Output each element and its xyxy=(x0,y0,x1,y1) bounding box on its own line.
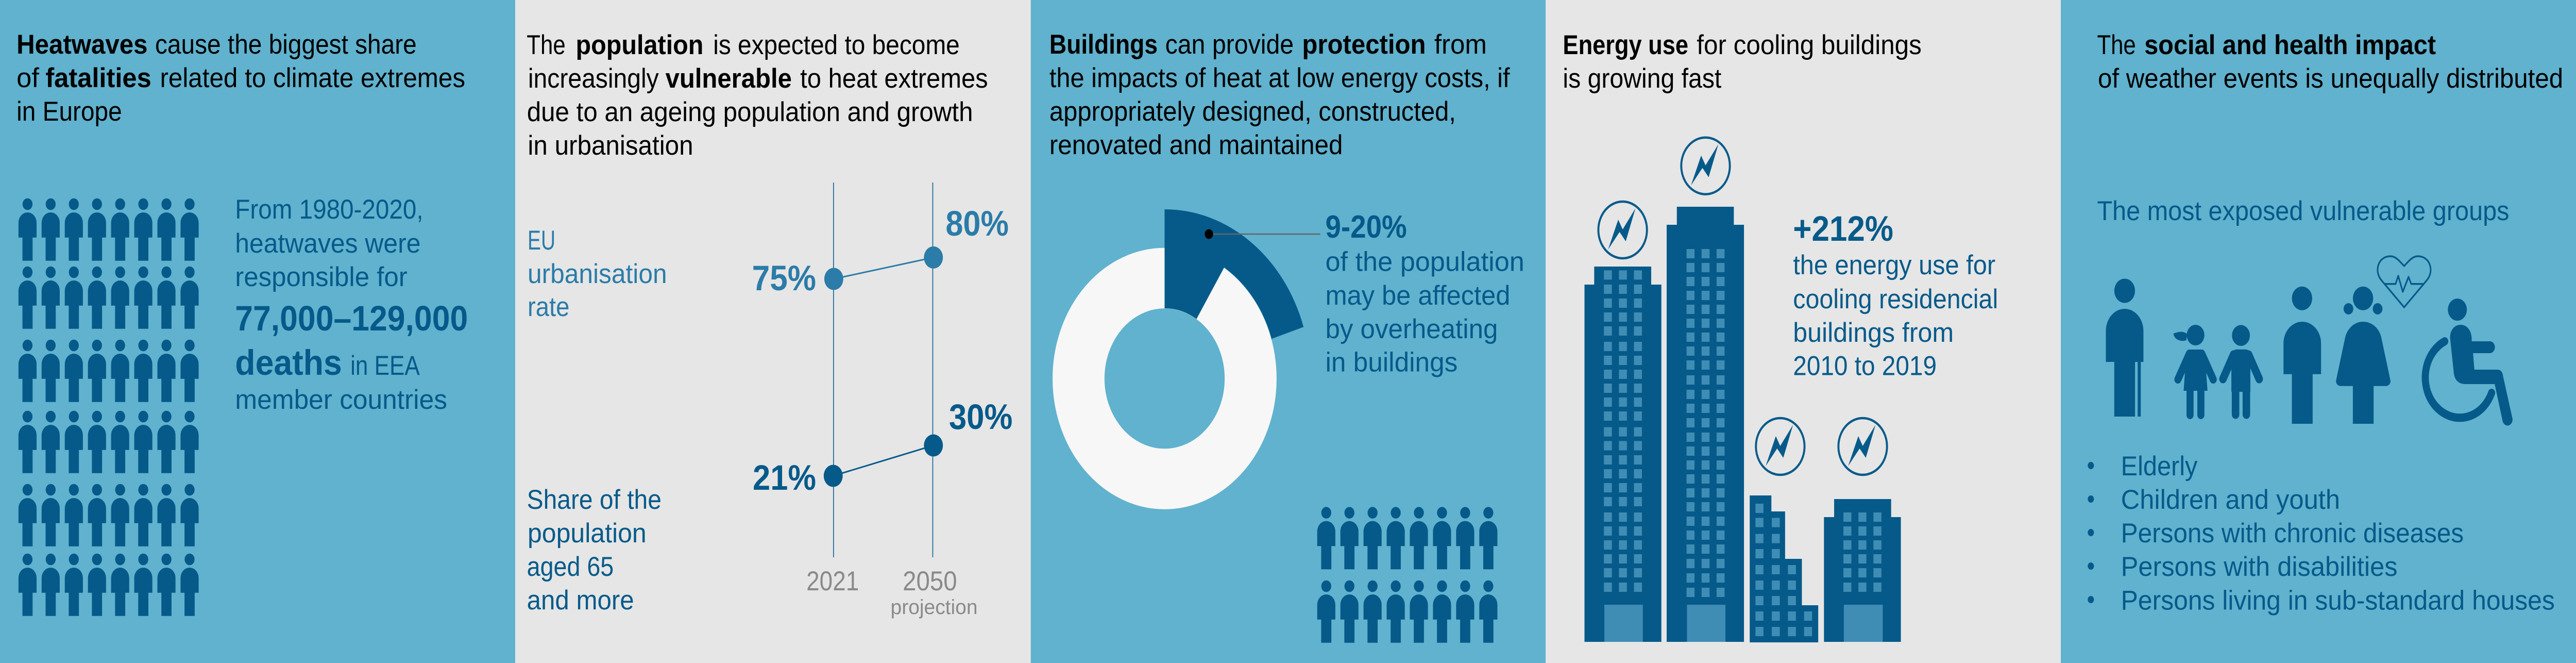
heading: heatwaves cause fatalities: related to climate extremes xyxy=(160,63,465,93)
series: population aged 65 and more xyxy=(753,397,1012,498)
text block: 9-20 percent affected: by overheating xyxy=(1325,314,1498,344)
label: share of the population aged 65 and more xyxy=(527,485,662,616)
series: urbanisation rate xyxy=(752,204,1009,298)
label: share of the population aged 65 and more: aged 65 xyxy=(527,552,614,582)
label: share of the population aged 65 and more: Share of the xyxy=(527,485,662,515)
text block: heatwave death toll: in EEA xyxy=(350,351,420,381)
series: urbanisation rate: 80% xyxy=(945,204,1009,243)
heading: population vulnerability: to heat extremes xyxy=(800,63,988,94)
text block: heatwave death toll xyxy=(235,194,468,415)
chart: donut of population affected by overheating xyxy=(1078,209,1303,479)
heading: heatwaves cause fatalities: in Europe xyxy=(16,96,122,127)
subheading: most exposed vulnerable groups: The most exposed vulnerable groups xyxy=(2097,196,2509,226)
icon: tall building two xyxy=(1667,207,1744,642)
heading: population vulnerability: due to an ageing population and growth xyxy=(527,97,973,127)
text block: 9-20 percent affected: 9-20% xyxy=(1325,209,1407,245)
label: EU urbanisation rate xyxy=(528,225,667,322)
heading: buildings can provide protection: appropriately designed, constructed, xyxy=(1049,96,1456,127)
panel: social and health impact xyxy=(2061,0,2576,663)
series: population aged 65 and more: 30% xyxy=(949,397,1012,437)
text block: +212 percent energy use: +212% xyxy=(1793,209,1893,248)
icons: energy bolts in circles xyxy=(1598,138,1887,475)
heading: buildings can provide protection: can provide xyxy=(1165,29,1294,60)
heading: social and health impact: of weather events is unequally distributed xyxy=(2098,63,2563,94)
heading: energy use growing fast: is growing fast xyxy=(1563,63,1722,94)
heading: buildings can provide protection: renovated and maintained xyxy=(1049,130,1343,160)
icon: stepped low building xyxy=(1750,495,1818,642)
series: population aged 65 and more: 21% xyxy=(753,458,816,498)
icon: person with chronic disease, woman xyxy=(2336,287,2391,424)
text block: 9-20 percent affected: may be affected xyxy=(1325,280,1510,311)
heading: population vulnerability: is expected to become xyxy=(713,30,960,60)
icon grid: people pictogram, six rows of eight xyxy=(19,198,199,616)
list: vulnerable groups: Persons with disabilities xyxy=(2121,552,2398,582)
heading: buildings can provide protection: Buildings xyxy=(1049,29,1158,60)
heading: energy use growing fast xyxy=(1563,30,1922,94)
text block: +212 percent energy use: cooling residencial xyxy=(1793,284,1998,314)
heading: buildings can provide protection: from xyxy=(1434,29,1487,60)
list: vulnerable groups: Persons with chronic diseases xyxy=(2121,518,2464,549)
heading: population vulnerability xyxy=(527,30,988,161)
heading: social and health impact: The xyxy=(2097,30,2136,60)
heading: buildings can provide protection: the impacts of heat at low energy costs, if xyxy=(1049,63,1510,93)
heading: population vulnerability: population xyxy=(575,30,703,60)
text block: heatwave death toll: deaths xyxy=(235,343,342,383)
heading: heatwaves cause fatalities: fatalities xyxy=(45,63,151,93)
heading: heatwaves cause fatalities: Heatwaves xyxy=(16,29,147,60)
axis labels: years: projection xyxy=(891,595,978,619)
axis labels: years xyxy=(806,566,978,619)
axis labels: years: 2021 xyxy=(806,566,859,596)
heading: population vulnerability: vulnerable xyxy=(666,63,792,94)
text block: +212 percent energy use: 2010 to 2019 xyxy=(1793,351,1937,381)
panel: energy use for cooling xyxy=(1546,0,2061,663)
heading: population vulnerability: increasingly xyxy=(528,63,659,94)
text block: 9-20 percent affected: of the population xyxy=(1325,246,1524,277)
chart: slope chart 2021 to 2050 xyxy=(752,183,1012,619)
heading: buildings can provide protection xyxy=(1049,29,1510,160)
text block: heatwave death toll: responsible for xyxy=(235,262,408,292)
axis labels: years: 2050 xyxy=(903,566,957,596)
label: EU urbanisation rate: EU xyxy=(528,225,555,256)
text block: heatwave death toll: heatwaves were xyxy=(235,228,420,259)
list: vulnerable groups: Persons living in sub-standard houses xyxy=(2121,585,2555,616)
icon: heart with pulse line xyxy=(2378,256,2431,307)
text block: heatwave death toll: From 1980-2020, xyxy=(235,194,423,225)
panel: buildings protection xyxy=(1031,0,1546,663)
label: EU urbanisation rate: rate xyxy=(528,292,569,322)
icon: elderly person with cane xyxy=(2106,278,2143,417)
list: vulnerable groups: Children and youth xyxy=(2121,485,2340,515)
heading: social and health impact: social and health impact xyxy=(2144,30,2436,60)
text block: 9-20 percent affected xyxy=(1325,209,1524,377)
text block: heatwave death toll: member countries xyxy=(235,385,447,415)
text block: +212 percent energy use xyxy=(1793,209,1998,381)
text block: 9-20 percent affected: in buildings xyxy=(1325,347,1458,377)
heading: population vulnerability: in urbanisation xyxy=(528,130,693,161)
icon: person with chronic disease, man xyxy=(2283,287,2321,424)
icon grid: people pictogram, two rows of eight xyxy=(1317,507,1497,643)
heading: energy use growing fast: Energy use xyxy=(1563,30,1688,60)
callout leader line xyxy=(1205,229,1320,239)
text block: heatwave death toll: 77,000–129,000 xyxy=(235,299,468,338)
icon: girl xyxy=(2174,325,2213,415)
label: share of the population aged 65 and more: population xyxy=(528,518,647,549)
heading: heatwaves cause fatalities xyxy=(16,29,465,127)
icon: tall building one xyxy=(1584,267,1662,642)
list: vulnerable groups: Elderly xyxy=(2121,451,2198,482)
heading: social and health impact xyxy=(2097,30,2563,94)
icon: short building xyxy=(1824,499,1901,642)
heading: heatwaves cause fatalities: of xyxy=(16,63,39,93)
icon: person in wheelchair xyxy=(2425,299,2513,425)
heading: population vulnerability: The xyxy=(527,30,566,60)
panel: vulnerable population xyxy=(515,0,1031,663)
heading: buildings can provide protection: protection xyxy=(1302,29,1426,60)
text block: +212 percent energy use: the energy use for xyxy=(1793,250,1995,280)
panel: heatwave fatalities xyxy=(0,0,515,663)
heading: energy use growing fast: for cooling buildings xyxy=(1697,30,1922,60)
icon: boy xyxy=(2223,325,2259,415)
text block: +212 percent energy use: buildings from xyxy=(1793,318,1954,348)
heading: heatwaves cause fatalities: cause the biggest share xyxy=(155,29,417,60)
label: share of the population aged 65 and more: and more xyxy=(527,585,634,616)
label: EU urbanisation rate: urbanisation xyxy=(528,259,667,289)
series: urbanisation rate: 75% xyxy=(752,258,816,298)
list: vulnerable groups xyxy=(2088,451,2555,616)
